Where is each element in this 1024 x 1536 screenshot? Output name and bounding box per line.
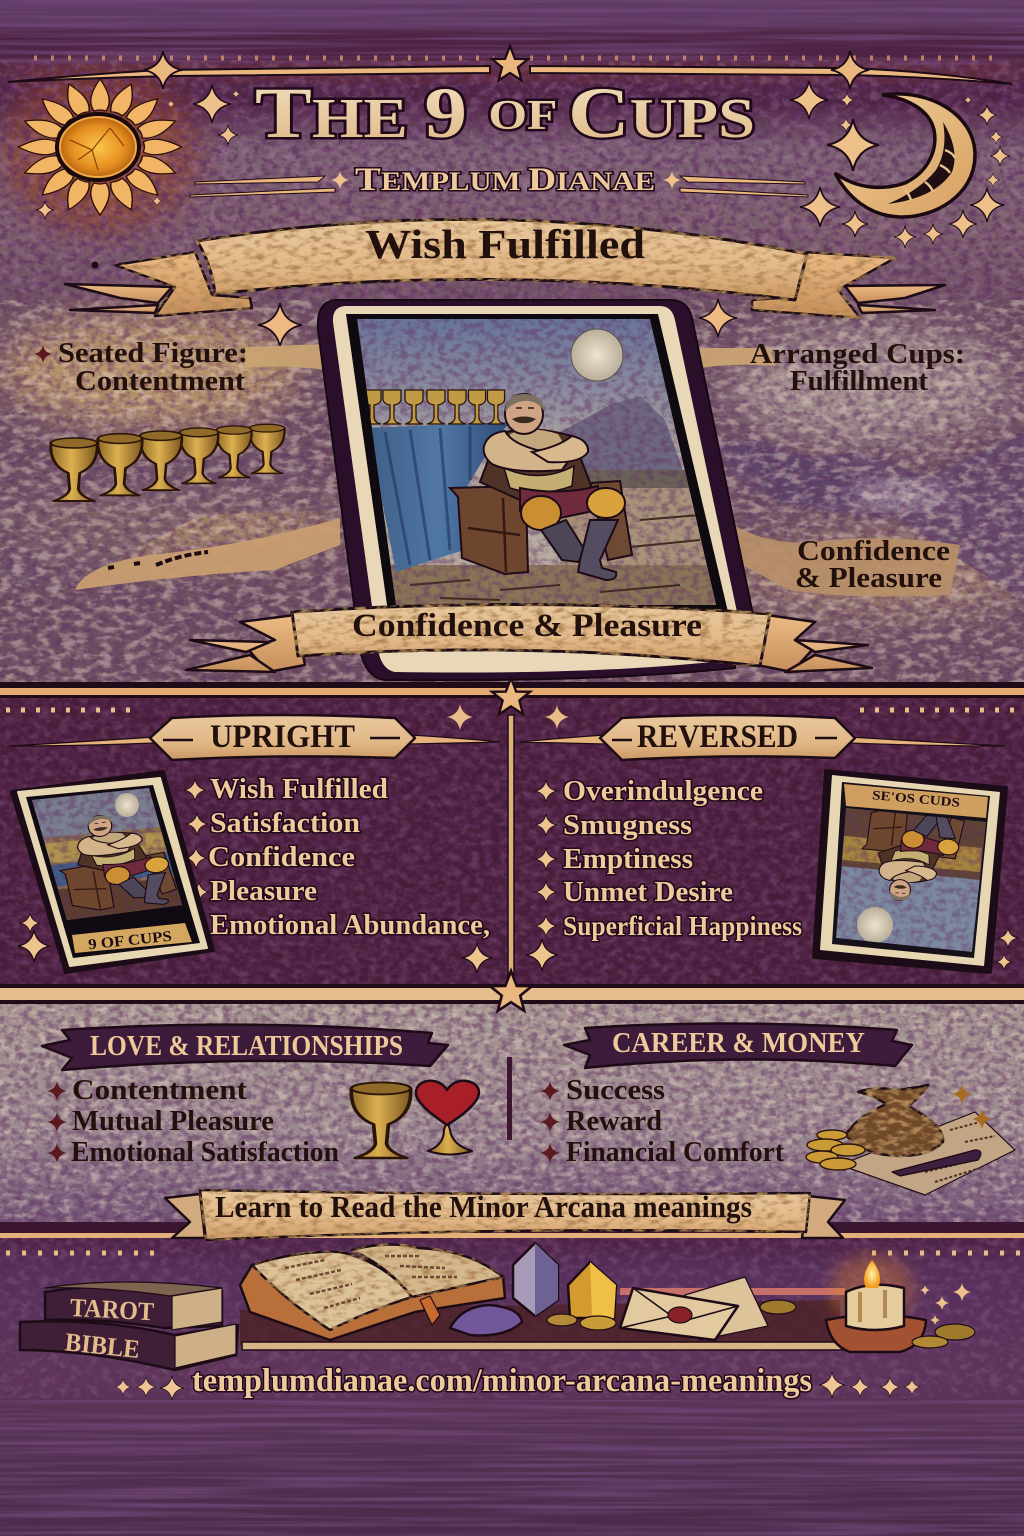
reversed list: Overindulgence <box>563 776 763 807</box>
reversed list: Unmet Desire <box>563 877 733 908</box>
subtitle: Templum Dianae: TEMPLUM DIANAE <box>355 162 655 198</box>
seated man <box>450 394 632 580</box>
banner: Confidence & Pleasure <box>186 604 872 672</box>
icon: crescent moon <box>835 94 975 217</box>
love & relationships ribbon: LOVE & RELATIONSHIPS <box>90 1030 403 1062</box>
icon: tarot and bible books: TAROT <box>69 1293 155 1326</box>
scene labels <box>34 338 965 594</box>
scene labels: Fulfillment <box>790 366 929 397</box>
title: C <box>568 73 630 153</box>
banner: Wish Fulfilled <box>65 219 945 318</box>
main tarot card <box>318 300 753 680</box>
upright corner stars <box>18 913 50 962</box>
reversed small card <box>814 771 1006 972</box>
vertical divider <box>508 715 514 977</box>
career list: Success <box>566 1074 665 1106</box>
scene labels: Confidence <box>797 536 950 567</box>
career list <box>540 1074 784 1168</box>
upright small card: 9 OF CUPS <box>87 929 173 953</box>
icon: tarot and bible books <box>20 1282 238 1370</box>
reversed header: REVERSED <box>637 719 798 755</box>
blue cloth <box>368 422 510 572</box>
reversed small card: SE'OS CUDS <box>872 787 961 810</box>
section divider with star <box>0 678 1024 714</box>
icon: envelope and letter <box>620 1277 796 1340</box>
reversed header <box>520 715 1005 760</box>
upright list: Pleasure <box>210 876 317 907</box>
career & money ribbon <box>564 1023 912 1068</box>
reversed corner stars <box>996 928 1018 970</box>
reversed list <box>526 776 802 971</box>
seven cups on table <box>363 390 505 424</box>
upright header: UPRIGHT <box>210 719 355 755</box>
subtitle: Templum Dianae <box>190 162 808 198</box>
icon: open book <box>240 1244 505 1340</box>
card artwork <box>350 315 730 610</box>
icon: money bag, coins and letter <box>806 1084 1015 1195</box>
career list: Reward <box>566 1105 662 1137</box>
card texture <box>350 315 730 610</box>
title: UPS <box>630 88 755 150</box>
upright list <box>184 774 492 973</box>
upright list: Wish Fulfilled <box>210 774 388 805</box>
upright header <box>10 715 500 760</box>
banner: Wish Fulfilled: Wish Fulfilled <box>365 221 645 267</box>
upright list: Confidence <box>208 842 355 873</box>
icon: sun <box>18 79 182 215</box>
reversed list: Smugness <box>563 810 692 841</box>
scene labels: Contentment <box>75 366 246 397</box>
footer website link: templumdianae.com/minor-arcana-meanings <box>192 1363 812 1399</box>
title: OF <box>488 93 568 139</box>
title <box>255 73 755 153</box>
upright list: Emotional Abundance, <box>210 910 490 941</box>
title: THE 9 <box>255 73 460 153</box>
love list: Mutual Pleasure <box>72 1105 274 1137</box>
shelf <box>240 1288 845 1350</box>
top ornamental rule <box>8 46 1012 89</box>
career list: Financial Comfort <box>566 1136 784 1168</box>
six cups on the left <box>51 424 285 501</box>
love list <box>47 1074 339 1168</box>
reversed list: Emptiness <box>563 844 693 875</box>
scene labels: Arranged Cups: <box>750 339 965 370</box>
lower band rule <box>0 1222 1024 1238</box>
scene: distant mountains <box>0 430 1024 600</box>
icon: tarot and bible books: BIBLE <box>64 1327 141 1364</box>
reversed list: Superficial Happiness <box>563 911 802 941</box>
decorative stars in header <box>36 81 1010 248</box>
love & relationships ribbon <box>42 1025 448 1070</box>
scene labels: Seated Figure: <box>58 338 248 369</box>
love list: Contentment <box>72 1074 247 1106</box>
stars beside banner <box>258 299 737 347</box>
vertical divider between topics <box>507 1057 512 1140</box>
scene labels: & Pleasure <box>795 563 942 594</box>
career & money ribbon: CAREER & MONEY <box>612 1027 865 1059</box>
second section divider <box>0 971 1024 1011</box>
decorative dot rows <box>6 704 1020 730</box>
ribbons flanking card <box>75 344 960 597</box>
banner: Confidence & Pleasure: Confidence & Pleasure <box>352 608 702 644</box>
banner: Learn to Read: Learn to Read the Minor Arcana meanings <box>215 1189 752 1224</box>
decorative dots lower <box>6 1250 1022 1256</box>
icon: goblet and heart <box>351 1081 479 1158</box>
icon: crystals and gems <box>450 1243 616 1335</box>
banner: Learn to Read <box>165 1189 845 1240</box>
upright list: Satisfaction <box>210 808 360 839</box>
upright small card <box>12 772 213 972</box>
icon: candle in bowl <box>826 1254 975 1352</box>
love list: Emotional Satisfaction <box>71 1136 339 1168</box>
